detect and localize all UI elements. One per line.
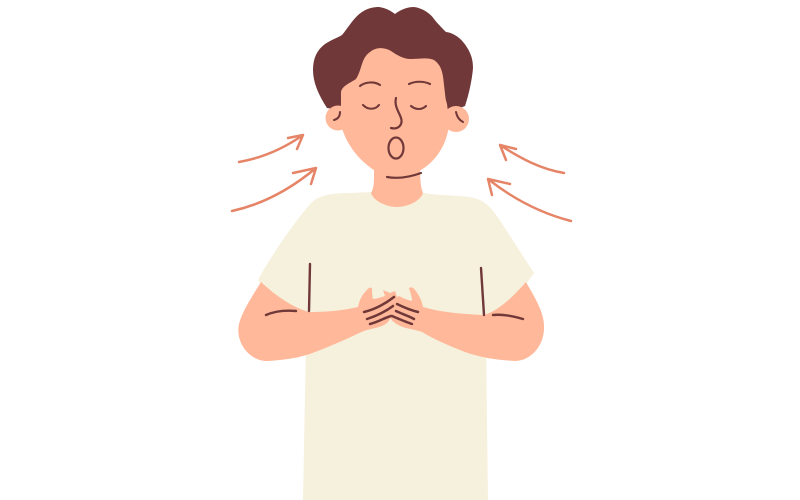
left eyebrow xyxy=(360,82,380,86)
nose xyxy=(391,98,402,128)
right closed eye xyxy=(411,106,426,109)
neck xyxy=(371,165,423,207)
left sleeve line xyxy=(309,264,310,311)
right elbow crease xyxy=(493,315,523,319)
arrow: lower right xyxy=(488,179,571,221)
chin line xyxy=(387,173,421,178)
left closed eye xyxy=(363,105,379,109)
arrow: upper left xyxy=(239,135,303,162)
right arm and hand xyxy=(390,282,544,361)
left elbow crease xyxy=(266,311,296,315)
facial features xyxy=(334,82,463,178)
right sleeve line xyxy=(481,268,484,315)
open mouth xyxy=(388,138,404,158)
left arm and hand xyxy=(238,282,397,361)
left ear xyxy=(326,106,350,130)
arrow: lower left xyxy=(232,168,316,211)
right hand fingers xyxy=(392,304,418,324)
clothing and hand lines xyxy=(266,264,523,324)
face xyxy=(341,48,449,177)
left ear line xyxy=(334,112,340,120)
airflow arrows xyxy=(232,135,571,221)
hair xyxy=(313,7,473,112)
left hand fingers xyxy=(364,297,394,324)
right ear line xyxy=(456,112,463,122)
shirt xyxy=(258,192,534,500)
right eyebrow xyxy=(409,82,430,84)
right ear xyxy=(443,106,469,132)
arrow: upper right xyxy=(500,145,564,173)
